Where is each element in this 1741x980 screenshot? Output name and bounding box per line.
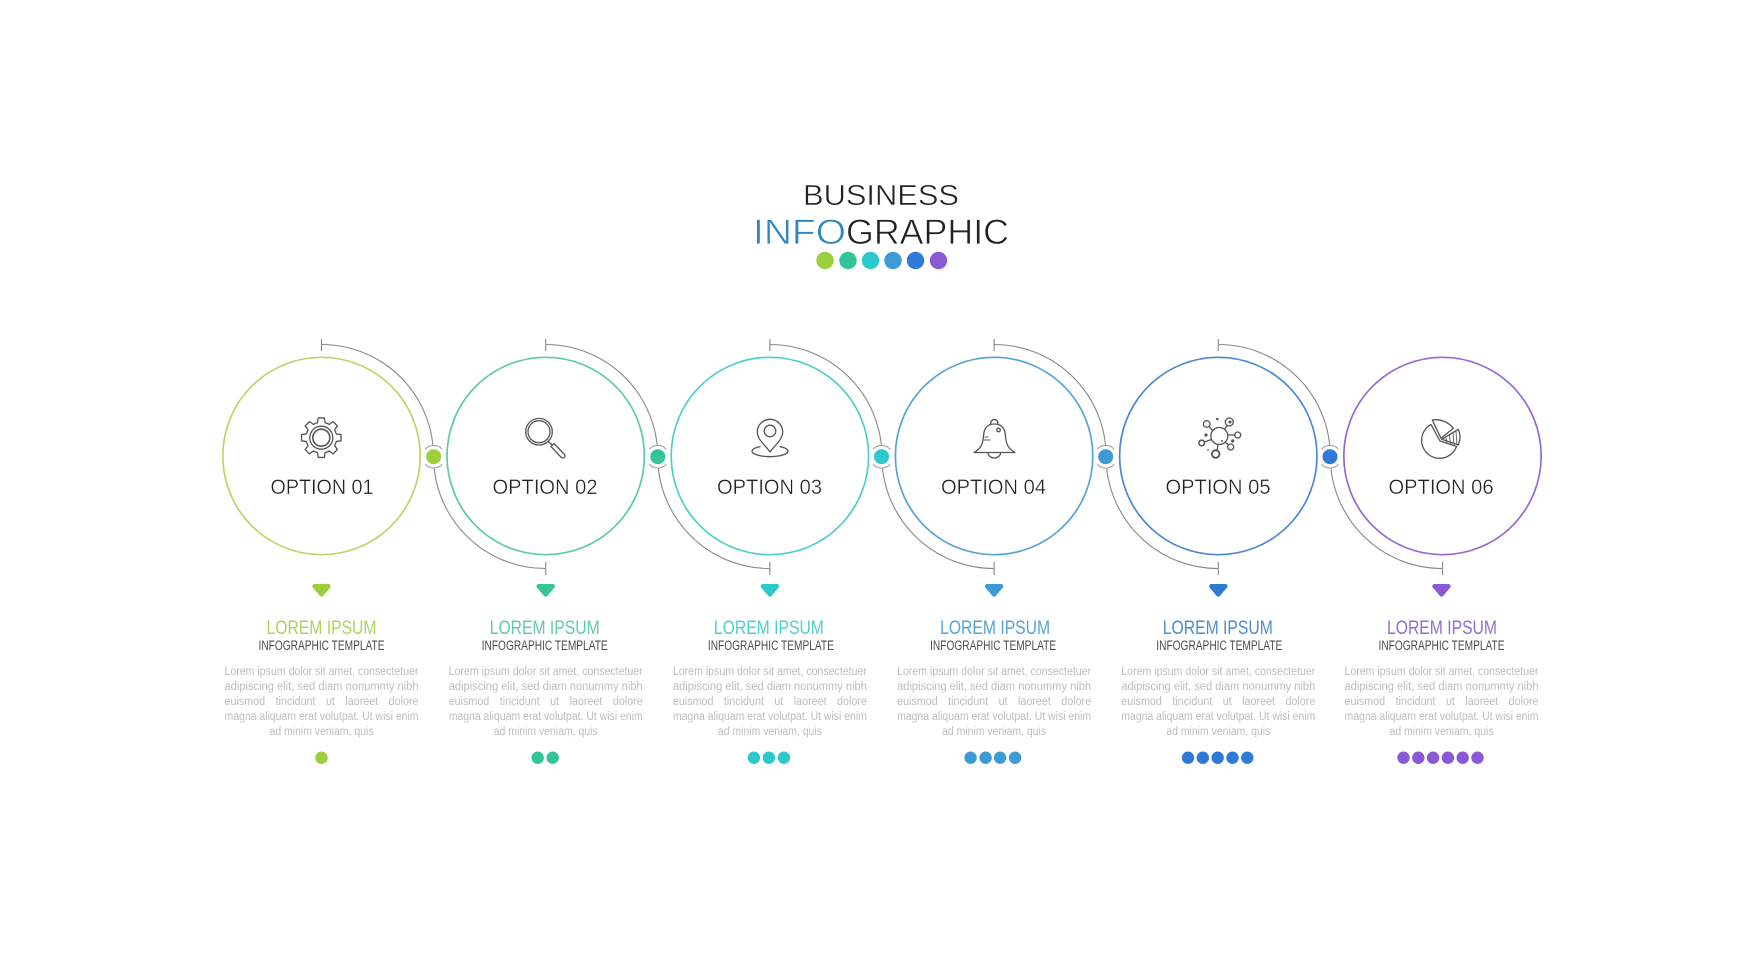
heading: LOREM IPSUM — [714, 617, 824, 639]
body text: magna aliquam erat volutpat. Ut wisi enim — [897, 711, 1091, 723]
heading: LOREM IPSUM — [1387, 617, 1497, 639]
body text: euismod tincidunt ut laoreet dolore — [224, 696, 418, 708]
subheading: INFOGRAPHIC TEMPLATE — [258, 638, 384, 653]
marker triangle — [1434, 586, 1448, 594]
connector dot 1 — [422, 445, 446, 469]
heading: LOREM IPSUM — [940, 617, 1050, 639]
connector dot 4 — [1094, 445, 1118, 469]
body text: euismod tincidunt ut laoreet dolore — [449, 696, 643, 708]
subheading: INFOGRAPHIC TEMPLATE — [708, 638, 834, 653]
body text: ad minim veniam, quis — [718, 726, 822, 738]
step dots — [1397, 752, 1484, 764]
panel: option 04 details — [897, 586, 1091, 764]
marker triangle — [987, 586, 1001, 594]
body text: adipiscing elit, sed diam nonummy nibh — [1121, 681, 1315, 693]
step dots — [1182, 752, 1254, 764]
panel: option 05 details — [1121, 586, 1315, 764]
circle: option 02 — [447, 357, 644, 555]
label: option 01: OPTION 01 — [270, 476, 374, 499]
body text — [449, 666, 643, 738]
title colour dots — [816, 252, 947, 269]
icon: gear — [302, 418, 341, 457]
heading: LOREM IPSUM — [1163, 617, 1273, 639]
body text: ad minim veniam, quis — [1166, 726, 1271, 738]
body text: Lorem ipsum dolor sit amet, consectetuer — [673, 666, 867, 678]
body text: euismod tincidunt ut laoreet dolore — [1344, 696, 1538, 708]
step dots — [964, 752, 1021, 764]
body text: Lorem ipsum dolor sit amet, consectetuer — [224, 666, 419, 678]
body text: adipiscing elit, sed diam nonummy nibh — [449, 681, 643, 693]
icon: network — [1199, 418, 1241, 458]
connector dot 5 — [1318, 445, 1342, 469]
body text: ad minim veniam, quis — [1390, 726, 1494, 738]
body text: euismod tincidunt ut laoreet dolore — [673, 696, 867, 708]
label: option 04: OPTION 04 — [941, 476, 1046, 499]
label: option 06: OPTION 06 — [1388, 476, 1494, 499]
body text: Lorem ipsum dolor sit amet, consectetuer — [1344, 666, 1539, 678]
body text: adipiscing elit, sed diam nonummy nibh — [224, 681, 418, 693]
body text: magna aliquam erat volutpat. Ut wisi enim — [1344, 711, 1538, 723]
circle: option 06 — [1344, 357, 1541, 555]
body text — [1344, 666, 1539, 738]
panel: option 01 details — [224, 586, 419, 764]
body text: adipiscing elit, sed diam nonummy nibh — [897, 681, 1091, 693]
body text: magna aliquam erat volutpat. Ut wisi enim — [673, 711, 867, 723]
body text: euismod tincidunt ut laoreet dolore — [1121, 696, 1315, 708]
body text — [224, 666, 419, 738]
title — [753, 180, 1009, 252]
body text: Lorem ipsum dolor sit amet, consectetuer — [897, 666, 1091, 678]
marker triangle — [763, 586, 777, 594]
circle: option 01 — [223, 357, 420, 555]
connector dot 2 — [646, 445, 670, 469]
label: option 02: OPTION 02 — [492, 476, 598, 499]
circle: option 03 — [671, 357, 869, 555]
heading: LOREM IPSUM — [266, 617, 376, 639]
body text: Lorem ipsum dolor sit amet, consectetuer — [449, 666, 643, 678]
subheading: INFOGRAPHIC TEMPLATE — [1378, 638, 1504, 653]
title: BUSINESS — [803, 180, 959, 212]
body text: magna aliquam erat volutpat. Ut wisi enim — [224, 711, 418, 723]
icon: bell — [974, 420, 1015, 458]
body text: adipiscing elit, sed diam nonummy nibh — [673, 681, 867, 693]
body text: ad minim veniam, quis — [494, 726, 598, 738]
subheading: INFOGRAPHIC TEMPLATE — [1156, 638, 1282, 653]
panel: option 02 details — [449, 586, 643, 764]
step dots — [315, 752, 328, 764]
label: option 03: OPTION 03 — [717, 476, 822, 499]
body text — [673, 666, 867, 738]
marker triangle — [1211, 586, 1225, 594]
body text: adipiscing elit, sed diam nonummy nibh — [1344, 681, 1538, 693]
body text — [897, 666, 1091, 738]
subheading: INFOGRAPHIC TEMPLATE — [930, 638, 1056, 653]
title: GRAPHIC — [846, 212, 1009, 252]
body text: ad minim veniam, quis — [270, 726, 374, 738]
title: INFO — [753, 212, 846, 252]
body text: euismod tincidunt ut laoreet dolore — [897, 696, 1091, 708]
step dots — [532, 752, 559, 764]
icon: magnifier — [526, 418, 565, 458]
heading: LOREM IPSUM — [490, 617, 600, 639]
circle: option 04 — [895, 357, 1093, 555]
connector dot 3 — [870, 445, 894, 469]
marker triangle — [539, 586, 553, 594]
body text — [1121, 666, 1315, 738]
body text: Lorem ipsum dolor sit amet, consectetuer — [1121, 666, 1315, 678]
connector arcs between circles — [322, 339, 1442, 575]
body text: ad minim veniam, quis — [942, 726, 1046, 738]
panel: option 06 details — [1344, 586, 1539, 764]
body text: magna aliquam erat volutpat. Ut wisi enim — [1121, 711, 1315, 723]
panel: option 03 details — [673, 586, 867, 764]
icon: pie chart — [1422, 420, 1460, 458]
body text: magna aliquam erat volutpat. Ut wisi enim — [449, 711, 643, 723]
step dots — [748, 752, 790, 764]
marker triangle — [314, 586, 328, 594]
subheading: INFOGRAPHIC TEMPLATE — [482, 638, 608, 653]
label: option 05: OPTION 05 — [1166, 476, 1270, 499]
circle: option 05 — [1120, 357, 1317, 555]
icon: map pin — [752, 419, 788, 457]
